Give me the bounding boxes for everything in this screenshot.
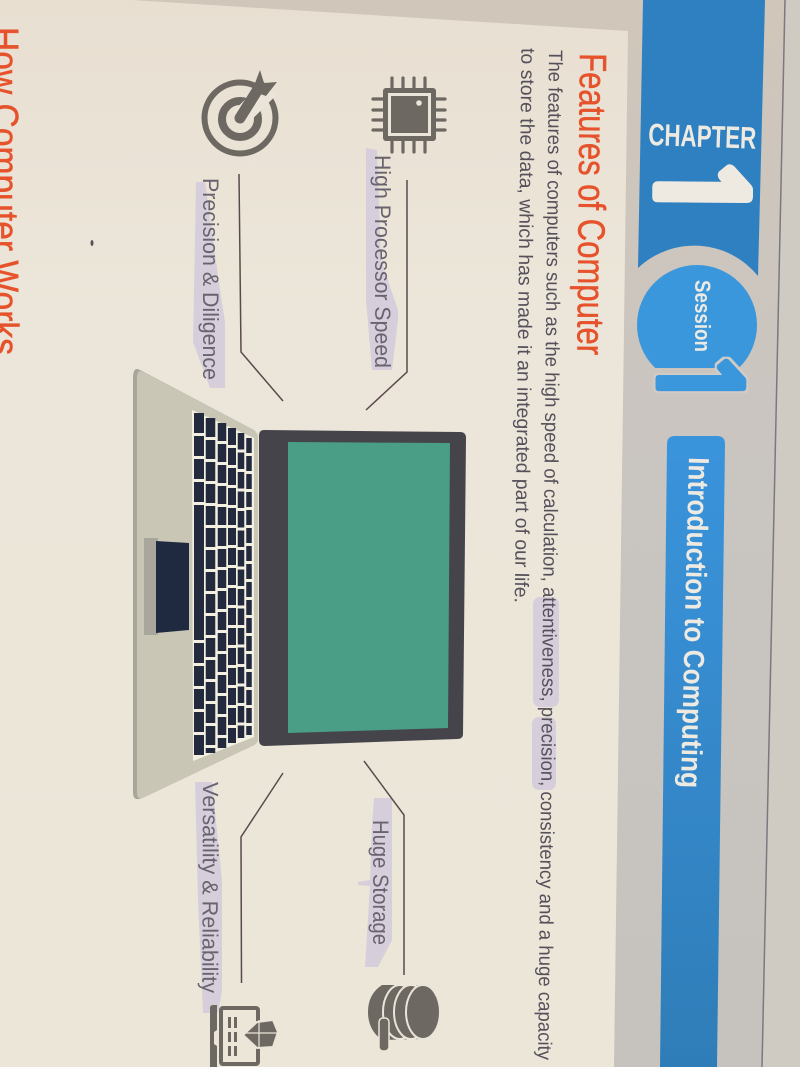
chapter number: 1 [637,152,759,227]
connector: storage [364,761,404,975]
icon: target with dart [204,70,277,154]
icon: database storage [368,985,440,1051]
trackpad [144,538,189,635]
connector: reliability [241,773,283,983]
label: versatility and reliability: Versatility & Reliability [197,782,223,993]
heading: features of computer: Features of Computer [568,53,613,356]
label: huge storage: Huge Storage [368,820,393,945]
session badge [637,265,757,368]
ink speck [90,240,94,246]
label: precision and diligence: Precision & Diligence [198,178,223,380]
highlight: precision [532,717,556,790]
body line 2: to store the data, which has made it an integrated part of our life. [510,48,538,603]
chapter label: CHAPTER [648,117,757,156]
connector: precision [239,174,283,401]
laptop screen [259,430,466,746]
laptop illustration [133,369,466,799]
screen display [288,442,450,733]
icon: shield document [210,1005,278,1067]
keyboard keys [199,413,249,758]
fold line [762,0,785,1067]
session label: Session [690,280,715,352]
chapter ribbon [638,0,765,276]
session number: 1 [641,346,754,415]
cream page panel [0,0,628,1067]
connector: processor speed [366,180,407,410]
laptop base [133,369,258,799]
keyboard bed [192,410,254,761]
laptop deck [137,371,258,798]
highlight: precision and diligence [193,182,225,388]
page margin right of fold [762,0,800,1067]
body paragraph [510,48,566,1060]
label: high processor speed: High Processor Speed [370,155,395,368]
highlight: versatility and reliability [195,782,222,1013]
highlight: attentiveness [533,597,559,707]
highlight: high processor speed [366,148,398,370]
icon: processor chip [373,78,445,152]
session title: Introduction to Computing [674,457,714,789]
session title tab [660,436,725,1067]
highlight: huge storage [358,798,392,967]
